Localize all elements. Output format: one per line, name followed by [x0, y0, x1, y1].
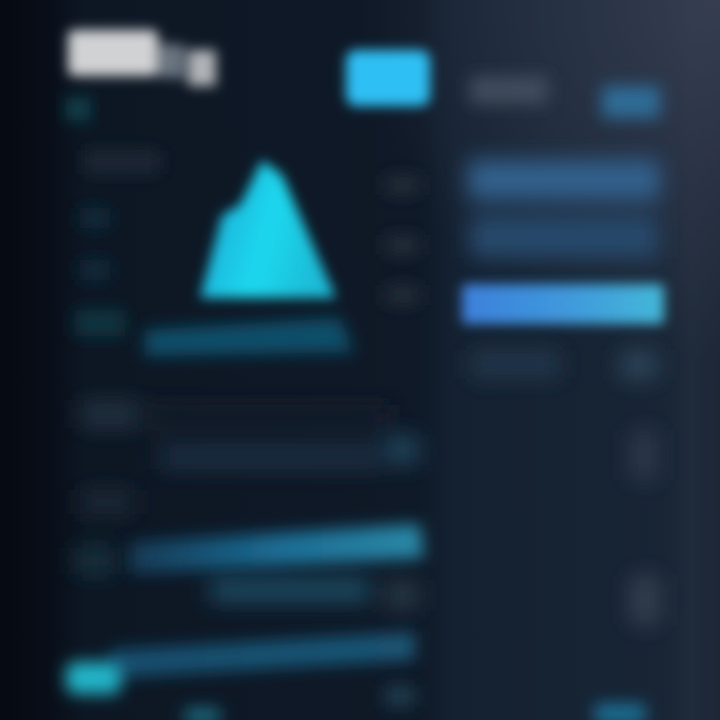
header: small teal tag: [66, 98, 90, 120]
right panel: muted rows: [470, 350, 660, 625]
bottom progress cyan start: [66, 662, 121, 694]
area chart: cyan peak: [200, 160, 336, 298]
right panel: highlighted row: [462, 284, 664, 324]
header: logo block: [68, 30, 216, 86]
header: grey label: [470, 76, 548, 104]
right panel: bottom accent: [595, 704, 645, 720]
bottom accents: [185, 685, 415, 720]
left panel: lower rows: [75, 400, 420, 610]
left panel: row labels: [75, 150, 420, 336]
bar: bottom progress: [110, 632, 415, 678]
header: blue label: [602, 86, 660, 118]
teal bar under chart: [145, 318, 354, 356]
bar: teal progress: [130, 524, 424, 574]
header: cyan button: [346, 50, 430, 106]
right panel: blue rows: [468, 160, 660, 258]
